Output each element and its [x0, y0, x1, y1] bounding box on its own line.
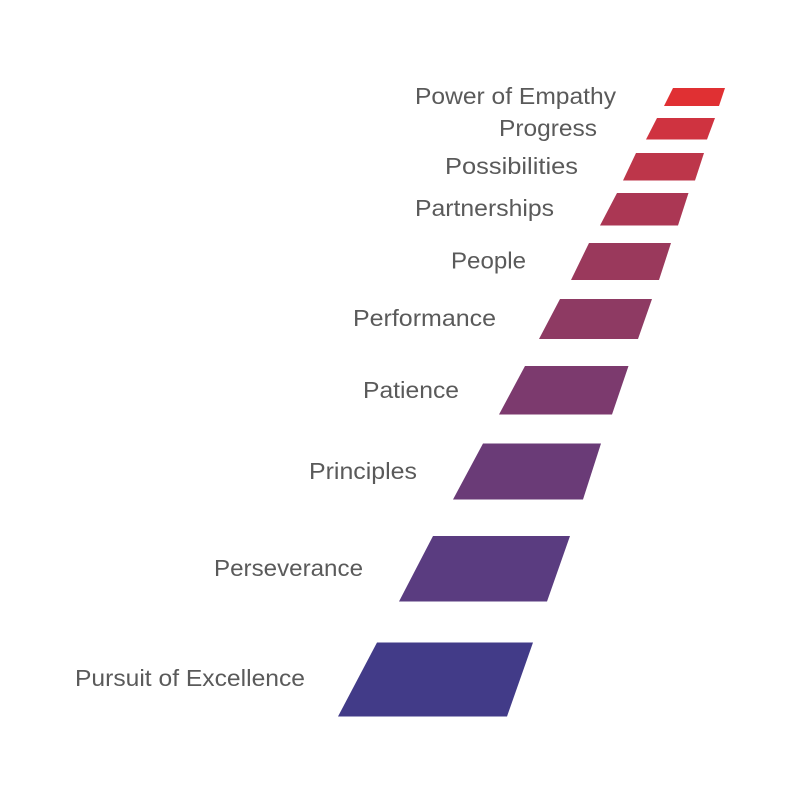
step: Power of Empathy: Power of Empathy [415, 83, 616, 109]
step: Pursuit of Excellence [75, 642, 533, 716]
step: Progress: Progress [499, 115, 597, 141]
step: Partnerships: Partnerships [415, 195, 554, 221]
step: Performance [353, 299, 652, 339]
step: Power of Empathy [415, 83, 725, 109]
step: Progress [499, 115, 715, 141]
step: Possibilities: Possibilities [445, 153, 578, 179]
step: Pursuit of Excellence: Pursuit of Excellence [75, 665, 305, 691]
step: Perseverance: Perseverance [214, 555, 363, 581]
step: People [451, 243, 671, 280]
step: Partnerships [415, 193, 688, 226]
step: Principles: Principles [309, 458, 417, 484]
step: Performance: Performance [353, 305, 496, 331]
step: Perseverance [214, 536, 570, 602]
step: Possibilities [445, 153, 704, 180]
step: People: People [451, 248, 526, 274]
step: Principles [309, 444, 601, 500]
step: Patience: Patience [363, 377, 459, 403]
step: Patience [363, 366, 628, 414]
